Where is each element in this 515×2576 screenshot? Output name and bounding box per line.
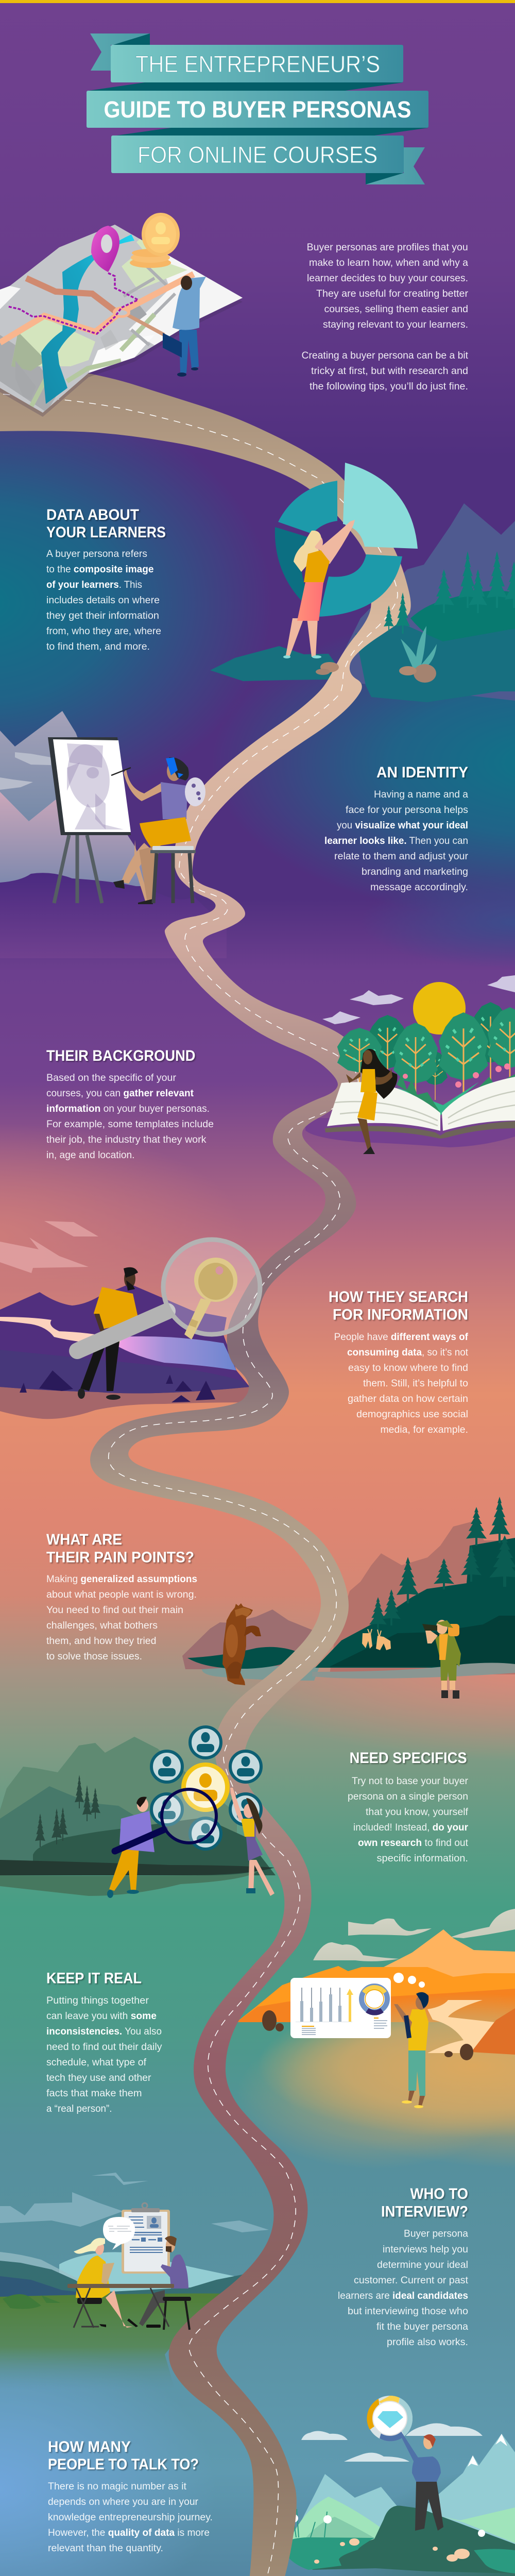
landscape: interview scene hills: [0, 2173, 269, 2391]
illustration: open book with trees and woman: [322, 975, 515, 1154]
illustration: man with magnifier and key: [77, 1240, 260, 1400]
heading: AN IDENTITY: [376, 764, 468, 781]
title text: GUIDE TO BUYER PERSONAS: [104, 96, 411, 123]
section: what are their pain points: [46, 1531, 197, 1662]
woman in yellow dress: [346, 1049, 397, 1154]
intro text: staying relevant to your learners.: [323, 319, 468, 330]
diamond badge: [367, 2396, 413, 2441]
easel: [48, 737, 131, 903]
body text: demographics use social: [356, 1409, 468, 1420]
intro text: learner decides to buy your courses.: [307, 273, 468, 284]
clouds: [322, 975, 515, 1024]
body text: their job, the industry that they work: [46, 1134, 207, 1145]
heading: [46, 506, 166, 541]
woman reaching: [230, 1788, 274, 1896]
intro text: make to learn how, when and why a: [309, 258, 468, 268]
body text: to the composite image: [46, 564, 153, 575]
body text: to solve those issues.: [46, 1651, 142, 1662]
section: who to interview: [338, 2185, 469, 2348]
heading: INTERVIEW?: [381, 2203, 468, 2221]
heading: HOW MANY: [48, 2438, 131, 2455]
intro text: They are useful for creating better: [316, 289, 469, 299]
body text: can leave you with some: [46, 2011, 157, 2022]
body text: [46, 549, 161, 652]
body text: gather data on how certain: [348, 1394, 468, 1404]
body text: [46, 1574, 197, 1662]
landscape: orange mountains and clouds: [236, 1909, 515, 2169]
intro text: [302, 242, 469, 392]
painter: [111, 757, 205, 904]
body text: fit the buyer persona: [376, 2321, 468, 2332]
body text: For example, some templates include: [46, 1119, 214, 1130]
body text: knowledge entrepreneurship journey.: [48, 2512, 213, 2523]
heading: YOUR LEARNERS: [46, 524, 166, 541]
illustration: interview at table with clipboard: [67, 2203, 191, 2330]
body text: face for your persona helps: [346, 805, 468, 816]
intro text: tricky at first, but with research and: [311, 366, 468, 377]
illustration: bear standing: [222, 1603, 261, 1685]
heading: [329, 1289, 468, 1323]
body text: consuming data, so it’s not: [347, 1347, 469, 1358]
body text: customer. Current or past: [354, 2275, 469, 2286]
body text: message accordingly.: [370, 882, 468, 893]
man with magnifier: [107, 1789, 216, 1898]
body text: easy to know where to find: [348, 1363, 468, 1374]
body text: Based on the specific of your: [46, 1073, 177, 1083]
body text: a “real person”.: [46, 2104, 112, 2114]
landscape: diamond scene mountains: [281, 2434, 515, 2573]
body text: [46, 1073, 214, 1161]
speech bubble: [103, 2217, 135, 2250]
section: how they search for information: [329, 1289, 469, 1435]
body text: courses, you can gather relevant: [46, 1088, 194, 1099]
section: need specifics: [348, 1750, 469, 1864]
top yellow bar: [0, 0, 515, 3]
body text: People have different ways of: [334, 1332, 469, 1343]
body text: included! Instead, do your: [353, 1822, 469, 1833]
section: their background: [46, 1047, 214, 1161]
body text: Having a name and a: [374, 789, 468, 800]
flowers and pebbles: [290, 2509, 485, 2564]
body text: challenges, what bothers: [46, 1620, 158, 1631]
body text: that you know, yourself: [366, 1807, 469, 1818]
body text: media, for example.: [380, 1425, 468, 1435]
businessman: [163, 276, 206, 377]
body text: own research to find out: [358, 1838, 469, 1849]
intro text: Creating a buyer persona can be a bit: [302, 350, 469, 361]
body text: information on your buyer personas.: [46, 1104, 210, 1114]
illustration: man holding diamond badge with clouds: [301, 2396, 483, 2531]
clouds: [301, 2423, 483, 2462]
woman: [394, 1992, 428, 2108]
body text: [334, 1332, 469, 1435]
landscape: avatars scene hills: [0, 1737, 276, 1896]
donut chart: [362, 1986, 387, 2013]
illustration: pines, plants and rocks beside the donut: [316, 551, 515, 683]
body text: Putting things together: [46, 1995, 149, 2006]
body text: about what people want is wrong.: [46, 1589, 197, 1600]
heading: [381, 2185, 468, 2221]
landscape: bear scene hills: [182, 1497, 515, 1681]
body text: tech they use and other: [46, 2073, 151, 2083]
illustration: dashboard card and woman: [290, 1973, 428, 2108]
heading: WHAT ARE: [46, 1531, 122, 1548]
body text: learner looks like. Then you can: [324, 836, 468, 846]
body text: determine your ideal: [377, 2260, 468, 2270]
man: [400, 2434, 443, 2531]
book: [325, 1077, 515, 1139]
body text: A buyer persona refers: [46, 549, 147, 560]
illustration: hiker with binoculars: [422, 1620, 461, 1699]
table: [67, 2284, 174, 2328]
body text: [48, 2481, 213, 2554]
body text: persona on a single person: [348, 1791, 468, 1802]
coin and coin stack: [130, 213, 180, 268]
illustration: avatars, magnifier and two people: [107, 1727, 274, 1898]
intro text: Buyer personas are profiles that you: [307, 242, 468, 253]
pine trees: [35, 1775, 100, 1847]
clipboard: [122, 2203, 170, 2274]
landscape: cloud shapes above magnifier: [0, 1221, 98, 1273]
body text: Buyer persona: [404, 2229, 468, 2240]
body text: of your learners. This: [46, 580, 142, 590]
central persona coin: [181, 1762, 230, 1812]
body text: interviews help you: [383, 2244, 468, 2255]
body text: Making generalized assumptions: [46, 1574, 197, 1585]
intro text: courses, selling them easier and: [324, 304, 468, 315]
heading: HOW THEY SEARCH: [329, 1289, 468, 1306]
body text: However, the quality of data is more: [48, 2528, 210, 2538]
heading: [48, 2438, 199, 2473]
body text: includes details on where: [46, 595, 160, 606]
heading: KEEP IT REAL: [46, 1970, 142, 1987]
body text: from, who they are, where: [46, 626, 161, 637]
section: how many people to talk to: [48, 2438, 213, 2554]
heading: [46, 1531, 194, 1566]
heading: DATA ABOUT: [46, 506, 139, 523]
body text: facts that make them: [46, 2088, 142, 2099]
thought bubbles: [393, 1973, 425, 1988]
body text: need to find out their daily: [46, 2042, 162, 2053]
avatars: [151, 1727, 261, 1849]
body text: Try not to base your buyer: [352, 1776, 469, 1787]
map pin: [91, 226, 119, 272]
man: [127, 2236, 191, 2330]
illustration: deer: [362, 1629, 391, 1650]
section: keep it real: [46, 1970, 162, 2114]
rocks: [262, 2010, 473, 2060]
dashboard card: [290, 1978, 391, 2038]
body text: they get their information: [46, 611, 159, 621]
illustration: folded map with pin, coin and businessman: [0, 213, 247, 417]
woman: [74, 2238, 133, 2328]
rocks: [20, 1370, 215, 1402]
body text: depends on where you are in your: [48, 2497, 199, 2507]
road centre dashes: [3, 394, 398, 2576]
body text: to find them, and more.: [46, 641, 150, 652]
body text: you visualize what your ideal: [337, 820, 468, 831]
body text: but interviewing those who: [348, 2306, 468, 2317]
heading: NEED SPECIFICS: [350, 1750, 467, 1767]
heading: WHO TO: [410, 2185, 468, 2202]
heading: THEIR PAIN POINTS?: [46, 1549, 194, 1566]
bar chart: [296, 1988, 353, 2035]
title text: [104, 51, 411, 168]
magnifier: [77, 1240, 260, 1351]
trees: [367, 1002, 511, 1100]
road: [0, 361, 411, 2576]
title text: FOR ONLINE COURSES: [138, 142, 377, 168]
body text: [46, 1995, 162, 2114]
body text: [348, 1776, 469, 1864]
section: an identity: [324, 764, 469, 893]
body text: learners are ideal candidates: [338, 2291, 468, 2301]
body text: schedule, what type of: [46, 2057, 147, 2068]
landscape: magnifier scene land: [0, 1284, 252, 1419]
key: [184, 1258, 237, 1340]
grass and flowers: [397, 1063, 515, 1115]
intro text: the following tips, you’ll do just fine.: [310, 381, 468, 392]
body text: specific information.: [377, 1853, 468, 1864]
title ribbon: [87, 33, 428, 184]
body text: relate to them and adjust your: [334, 851, 469, 862]
body text: branding and marketing: [362, 867, 468, 877]
body text: in, age and location.: [46, 1150, 135, 1161]
body text: You need to find out their main: [46, 1605, 183, 1616]
illustration: persona data donut with woman: [275, 463, 418, 658]
body text: inconsistencies. You also: [46, 2026, 162, 2037]
body text: them, and how they tried: [46, 1636, 157, 1647]
heading: PEOPLE TO TALK TO?: [48, 2456, 199, 2473]
title text: THE ENTREPRENEUR’S: [135, 51, 380, 77]
heading: THEIR BACKGROUND: [46, 1047, 196, 1064]
body text: [338, 2229, 469, 2348]
body text: There is no magic number as it: [48, 2481, 187, 2492]
body text: relevant than the quantity.: [48, 2543, 163, 2554]
landscape: painter mountains: [0, 711, 227, 958]
landscape: mountains and hill behind data donut: [210, 503, 515, 702]
illustration: painter at easel: [48, 737, 205, 904]
pine trees: [369, 1497, 515, 1631]
body text: them. Still, it’s helpful to: [363, 1378, 468, 1389]
section: data about your learners: [46, 506, 166, 652]
woman: [283, 520, 355, 658]
man: [78, 1267, 138, 1400]
landscape: book scene ground: [305, 1118, 515, 1147]
heading: FOR INFORMATION: [333, 1307, 468, 1323]
body text: profile also works.: [387, 2337, 468, 2348]
body text: [324, 789, 469, 893]
